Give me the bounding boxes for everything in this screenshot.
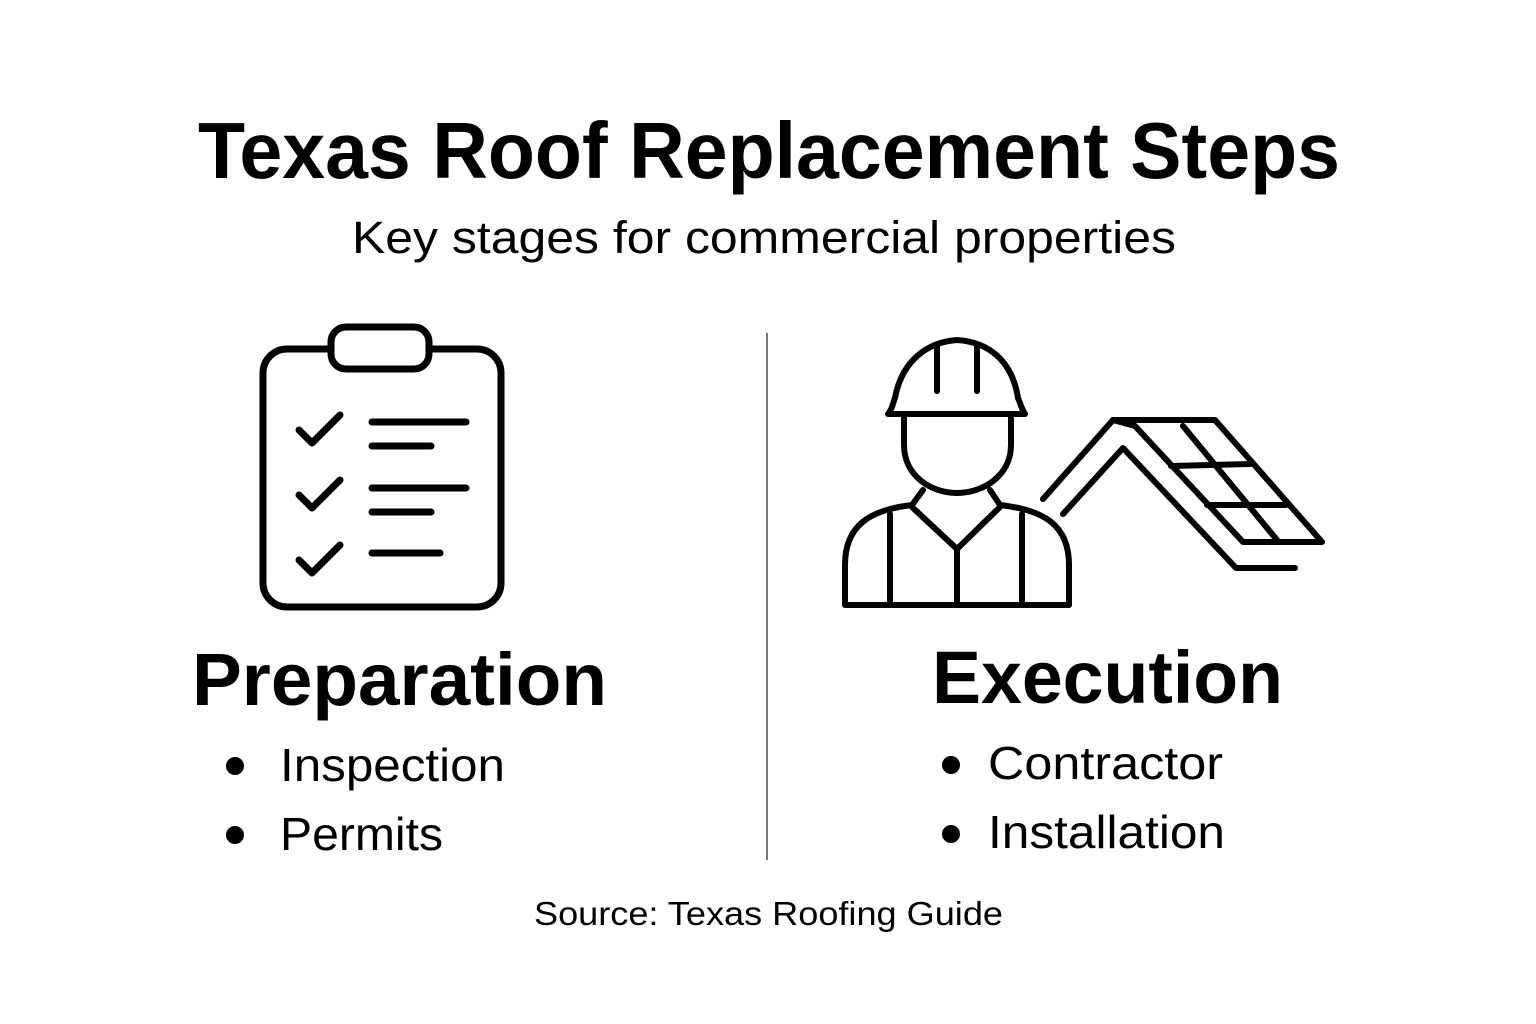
source: Source: Texas Roofing Guide [534, 895, 1003, 932]
icon: worker with roof [845, 340, 1322, 605]
heading: execution: Execution [932, 636, 1283, 719]
list: execution [942, 737, 1225, 858]
heading: preparation: Preparation [192, 638, 607, 721]
panel: execution [845, 340, 1322, 858]
list: preparation [226, 739, 505, 860]
title: Texas Roof Replacement Steps [198, 106, 1340, 195]
subtitle: Key stages for commercial properties [352, 212, 1176, 263]
list: execution: Installation [988, 806, 1225, 858]
list: execution: Contractor [988, 737, 1223, 789]
list: preparation: Permits [280, 808, 443, 860]
list: preparation: Inspection [280, 739, 505, 791]
panel: preparation [192, 327, 607, 860]
icon: clipboard [263, 327, 501, 607]
